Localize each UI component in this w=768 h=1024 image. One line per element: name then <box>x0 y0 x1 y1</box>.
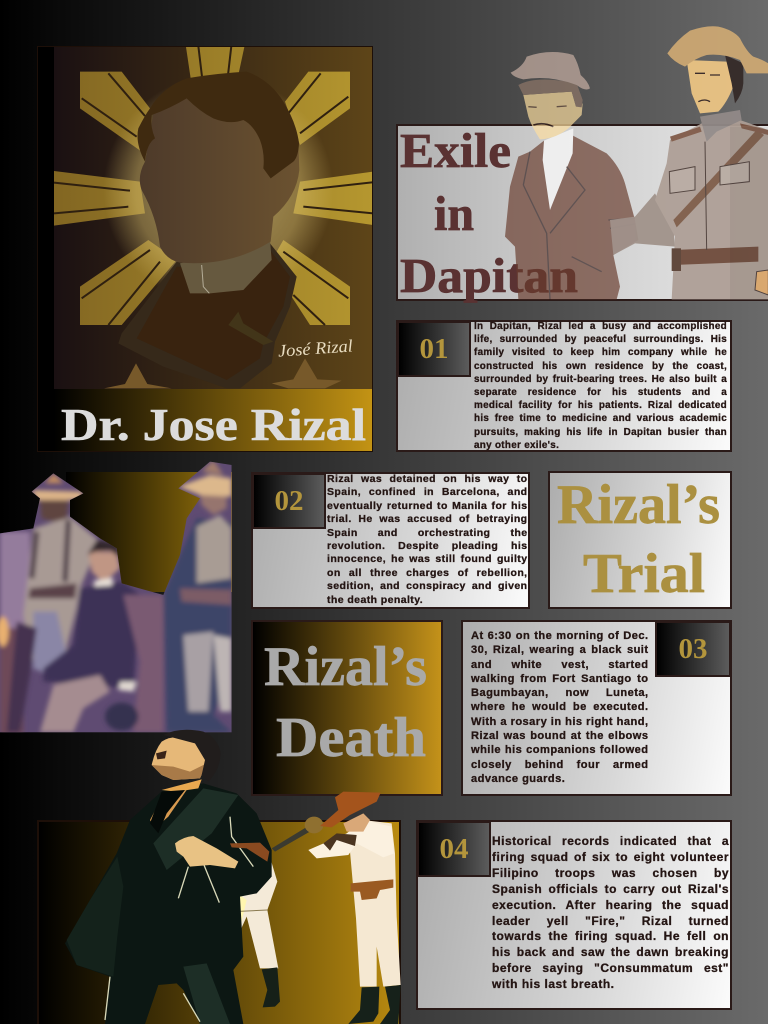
card 04: execution text <box>416 820 732 1010</box>
illustration: painting of Rizal seated between guards <box>0 462 232 732</box>
text block 01: In Dapitan, Rizal led a busy and accomplished <box>474 321 727 332</box>
text block 02: on all three charges of rebellion, <box>327 567 528 579</box>
text block 04: with his last breath. <box>492 977 615 991</box>
signature: José Rizal <box>277 336 354 361</box>
heading: Exile in Dapitan: Exile <box>400 123 511 178</box>
text block 03: closely behind four armed <box>471 759 648 771</box>
text block 02: revolution. Despite pleading his <box>327 540 528 552</box>
panel: Rizal's Death heading <box>251 620 443 796</box>
card 03: death march text <box>461 620 732 796</box>
text block 02: the death penalty. <box>327 594 423 606</box>
text block 01 <box>474 321 727 451</box>
text block 03: and white vest, started <box>471 659 648 671</box>
text block 02 <box>326 473 528 606</box>
icon: stars <box>104 358 342 388</box>
number badge 03: 03 <box>678 632 708 664</box>
text block 02: sedition, and conspiracy and given <box>327 580 528 592</box>
heading: Exile in Dapitan: in <box>434 186 474 241</box>
panel: Rizal's Trial heading <box>548 471 732 609</box>
number badge 02 <box>252 473 326 529</box>
text block 04: leader yell "Fire," Rizal turned <box>492 914 729 928</box>
title: Dr. Jose Rizal: Dr. Jose Rizal <box>61 399 366 450</box>
text block 03: Bagumbayan, now Luneta, <box>471 687 648 699</box>
text block 01: any other exile's. <box>474 440 559 451</box>
text block 01: family visited to keep him company while he <box>474 347 727 358</box>
text block 03: Rizal was bound at the elbows <box>471 730 648 742</box>
text block 01: constructed his own residence by the coast, <box>474 361 727 372</box>
card 02: trial text <box>251 472 530 609</box>
text block 01: medical facility for his patients. Rizal dedicated <box>474 400 727 411</box>
figure: guard in khaki uniform <box>610 26 768 299</box>
text block 02: Spain and orchestrating the <box>327 527 528 539</box>
text block 04: towards the firing squad. He fell on <box>492 929 729 943</box>
text block 01: surrounded by fruit-bearing trees. He also built a <box>474 374 727 385</box>
panel: Rizal's Trial heading: Trial <box>583 543 705 605</box>
text block 04: execution. After hearing the squad <box>492 898 729 912</box>
panel: gold backdrop for execution scene <box>37 820 401 1024</box>
text block 04: Historical records indicated that a <box>492 834 729 848</box>
figure: Rizal in coat and hat <box>505 52 638 299</box>
panel: Rizal's Death heading: Death <box>276 707 426 769</box>
text block 01: pursuits, making his life in Dapitan busier than <box>474 427 727 438</box>
portrait silhouette <box>118 72 299 388</box>
card 01: Dapitan text <box>396 320 732 452</box>
figure: rear soldier <box>226 817 323 1007</box>
icon: sun rays <box>54 47 373 325</box>
text block 04: his back and saw the dawn breaking <box>492 945 729 959</box>
number badge 01: 01 <box>420 332 448 364</box>
number badge 04 <box>417 821 491 877</box>
panel: Rizal's Death heading: Rizal’s <box>264 636 427 698</box>
text block 01: his free time to medicine and various academic <box>474 413 727 424</box>
text block 04: Filipino troops was chosen by <box>492 866 729 880</box>
text block 03: At 6:30 on the morning of Dec. <box>471 630 648 642</box>
text block 03: 30, Rizal, wearing a black suit <box>471 644 648 656</box>
text block 02: innocence, he was still found guilty <box>327 553 528 565</box>
number badge 01 <box>397 321 471 377</box>
text block 02: Rizal was detained on his way to <box>327 473 528 485</box>
text block 02: Spain, confined in Barcelona, and <box>327 486 528 498</box>
panel: gold backdrop behind trial painting <box>66 472 232 592</box>
number badge 03 <box>655 621 731 677</box>
text block 04 <box>492 834 729 991</box>
text block 03: With a rosary in his right hand, <box>471 716 648 728</box>
number badge 02: 02 <box>274 484 304 516</box>
text block 02: trial. He was accused of betraying <box>327 513 528 525</box>
panel: Rizal's Trial heading: Rizal’s <box>557 474 720 536</box>
text block 03 <box>470 630 648 785</box>
panel: Exile in Dapitan heading <box>396 124 768 301</box>
text block 04: before saying "Consummatum est" <box>492 961 729 975</box>
number badge 04: 04 <box>440 832 468 864</box>
text block 03: where he would be executed. <box>471 701 648 713</box>
text block 03: advance guards. <box>471 773 565 785</box>
panel: portrait of Dr. Jose Rizal <box>37 46 373 452</box>
text block 01: separate residence for his students and a <box>474 387 727 398</box>
text block 03: walking from Fort Santiago to <box>471 673 648 685</box>
figure: Rizal in black suit <box>65 730 272 1024</box>
text block 04: Spanish officials to carry out Rizal's <box>492 882 729 896</box>
text block 02: eventually returned to Manila for his <box>327 500 528 512</box>
text block 04: firing squad of six to eight volunteer <box>492 850 729 864</box>
text block 01: life, surrounded by peaceful surroundings. His <box>474 334 727 345</box>
heading: Exile in Dapitan: Dapitan <box>400 248 578 303</box>
figure: firing soldier <box>308 792 401 1024</box>
text block 03: while his companions followed <box>471 744 648 756</box>
